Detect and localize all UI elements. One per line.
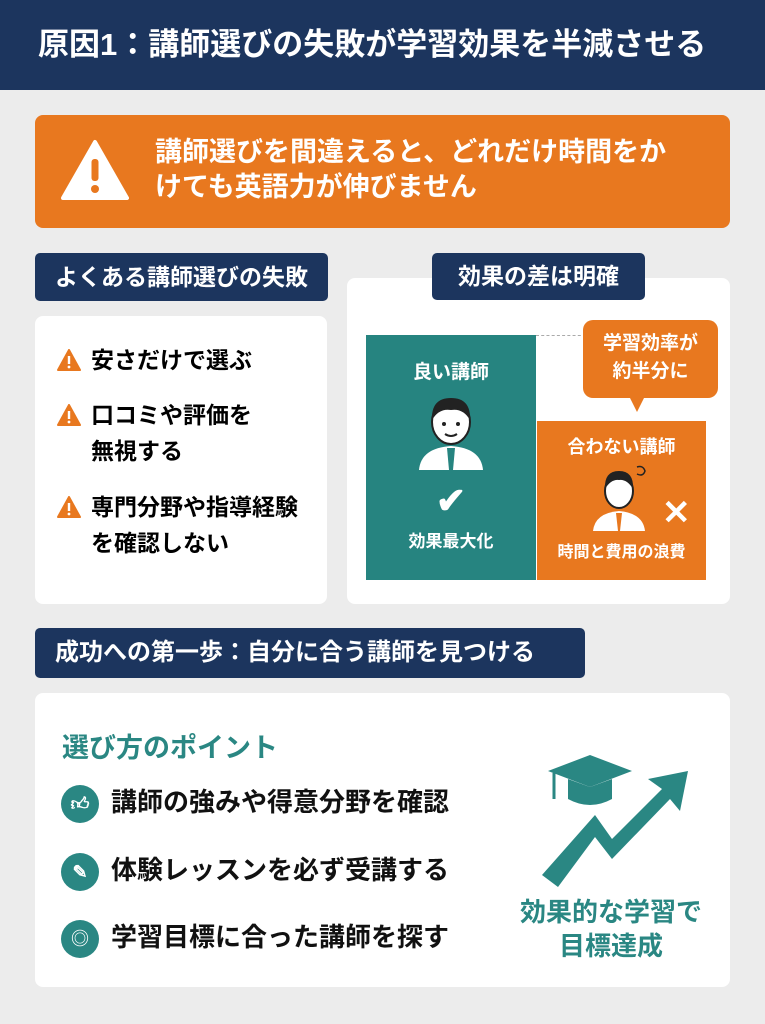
dashed line: [536, 335, 586, 336]
callout bubble: 約半分に: [612, 361, 688, 382]
point 1: 講師の強みや得意分野を確認: [111, 787, 449, 817]
point 1: 👍︎: [71, 794, 89, 814]
point 1: [61, 785, 449, 823]
conclusion text: 目標達成: [559, 931, 663, 961]
banner text: 講師選びを間違えると、どれだけ時間をか: [155, 137, 666, 167]
callout bubble: 学習効率が: [603, 333, 698, 354]
item 1: 安さだけで選ぶ: [91, 347, 252, 373]
point 2: 体験レッスンを必ず受講する: [111, 855, 449, 885]
panel: selection points: [35, 693, 730, 987]
icon: cap and growth arrow: [542, 755, 688, 887]
point 2: ✎: [72, 862, 88, 882]
item 2: 口コミや評価を: [91, 402, 252, 428]
item 2: [57, 402, 252, 464]
callout bubble: [583, 320, 718, 398]
icon: person smiling: [419, 398, 483, 470]
icon: check: ✔: [436, 480, 466, 521]
section label: first step: [35, 628, 585, 678]
orange block: mismatched teacher: 時間と費用の浪費: [557, 544, 686, 561]
label: effect difference: 効果の差は明確: [458, 263, 619, 289]
title bar: [0, 0, 765, 90]
icon: warning triangle: [61, 140, 129, 200]
warning banner: [35, 115, 730, 228]
banner text: [155, 137, 666, 202]
item 3: を確認しない: [91, 530, 229, 556]
heading: 選び方のポイント: [62, 733, 278, 763]
point 3: [61, 920, 449, 958]
item 2: 無視する: [91, 438, 183, 464]
label: effect difference: [432, 253, 645, 300]
orange block: mismatched teacher: 合わない講師: [568, 437, 676, 457]
orange block: mismatched teacher: [537, 421, 706, 580]
section label: first step: 成功への第一歩：自分に合う講師を見つける: [55, 639, 535, 666]
label: common failures: [35, 253, 328, 301]
point 3: 学習目標に合った講師を探す: [111, 922, 449, 952]
title bar: 原因1：講師選びの失敗が学習効果を半減させる: [38, 27, 706, 62]
item 3: 専門分野や指導経験: [91, 494, 298, 520]
conclusion text: [520, 897, 702, 961]
teal block: good teacher: 効果最大化: [408, 532, 494, 551]
teal block: good teacher: [366, 335, 536, 580]
panel: effect comparison: [347, 278, 730, 604]
banner text: けても英語力が伸びません: [155, 172, 477, 202]
label: common failures: よくある講師選びの失敗: [55, 264, 308, 290]
icon: troubled person: [593, 466, 646, 531]
conclusion text: 効果的な学習で: [520, 897, 702, 927]
panel: failures list: [35, 316, 327, 604]
item 3: [57, 494, 298, 556]
teal block: good teacher: 良い講師: [413, 362, 489, 383]
point 3: ◎: [71, 929, 89, 949]
point 2: [61, 853, 449, 891]
icon: cross: ✕: [662, 494, 690, 532]
